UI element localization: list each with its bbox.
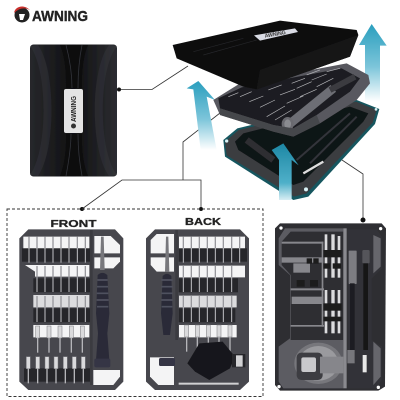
- screwdriver: [94, 237, 110, 367]
- side tool: [232, 354, 245, 367]
- long tools: [347, 250, 370, 372]
- bits rows: [183, 237, 240, 352]
- dark rails: [22, 230, 93, 385]
- exploded product stack: [173, 21, 387, 200]
- connector lines: [82, 66, 363, 219]
- lid label: AWNING: [264, 30, 286, 40]
- lid label: [254, 28, 298, 41]
- case label: AWNING: [71, 96, 78, 122]
- spudger pick: [187, 342, 235, 380]
- arrow: center lift: [272, 143, 299, 200]
- corner screws: [277, 226, 382, 389]
- tray body: [275, 223, 386, 391]
- dark rails: [175, 230, 247, 385]
- closed case photo: [30, 44, 117, 176]
- icon: brand mark: [14, 6, 30, 23]
- connector dots: [80, 88, 366, 222]
- suction cup: [294, 343, 343, 384]
- white cut-outs: [23, 236, 120, 385]
- tray body: [19, 229, 123, 390]
- bits rows: [26, 237, 86, 383]
- screwdriver: [159, 237, 175, 366]
- bit holders: [325, 234, 340, 333]
- panel: front tray: [19, 229, 123, 390]
- heading: front: FRONT: [50, 219, 96, 230]
- heading: back: BACK: [185, 217, 222, 228]
- center racks: [282, 242, 324, 327]
- tray body: [146, 229, 249, 390]
- dashed frame: [7, 209, 263, 396]
- arrow: left lift: [187, 81, 217, 150]
- center compartment: [282, 232, 343, 340]
- panel: back tray: [146, 229, 249, 390]
- panel: base tray: [275, 223, 386, 391]
- white cut-outs: [150, 234, 245, 385]
- arrow: right lift: [359, 24, 387, 102]
- brand name: AWNING: [32, 8, 88, 25]
- divider rail: [343, 228, 347, 388]
- base tray: [223, 100, 379, 200]
- middle bit tray: [213, 63, 370, 137]
- logo: AWNING brand: [14, 6, 88, 25]
- lid: [173, 21, 358, 89]
